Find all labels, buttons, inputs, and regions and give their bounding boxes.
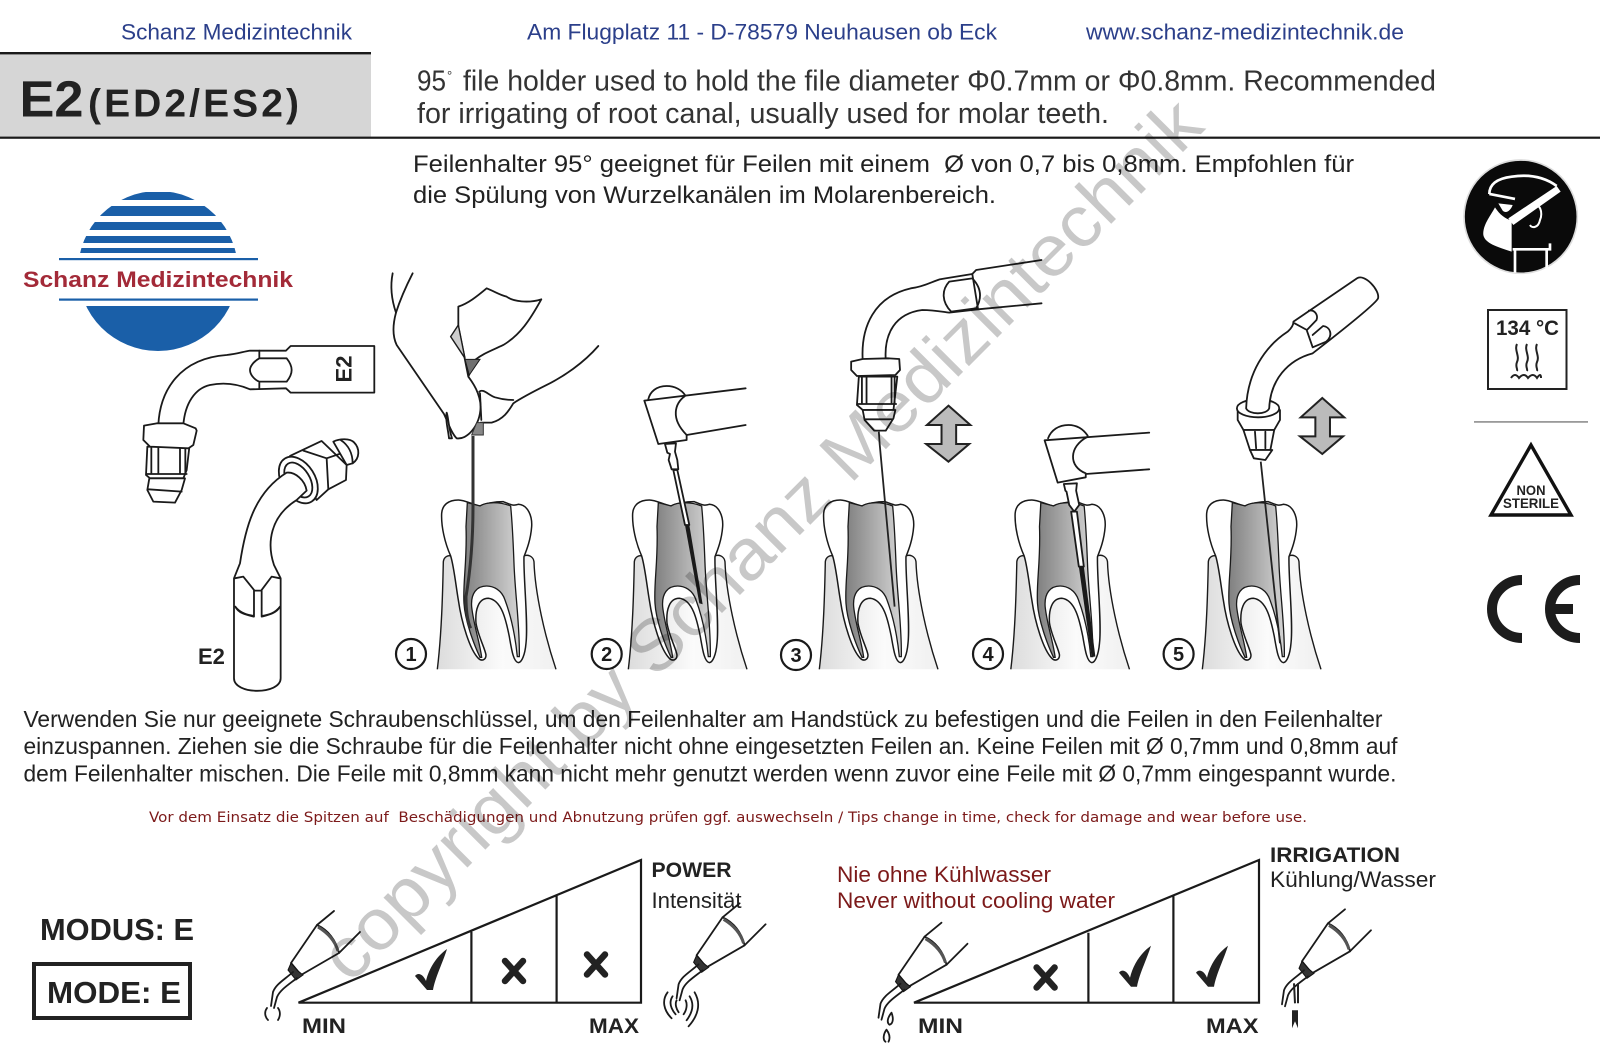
step 3: ultrasonic tip with file <box>819 260 1042 669</box>
English description: file holder used to hold the file diameter Φ0.7mm or Φ0.8mm. Recommended <box>463 66 1436 98</box>
safety icon: wear mask <box>1464 160 1577 273</box>
German description <box>413 151 1354 209</box>
warning line: Vor dem Einsatz die Spitzen auf Beschädigungen und Abnutzung prüfen ggf. auswechseln / Tips change in time, check for damage and wear before use. <box>149 809 1307 826</box>
step numbers: 1 <box>405 644 417 666</box>
English description: ° <box>447 68 452 83</box>
cooling warning text: Nie ohne Kühlwasser <box>837 862 1052 887</box>
non sterile icon: STERILE <box>1503 495 1559 511</box>
instructions paragraph: dem Feilenhalter mischen. Die Feile mit 0,8mm kann nicht mehr genutzt werden wenn zuvor eine Feile mit Ø 0,7mm eingespannt wurde. <box>24 760 1396 786</box>
step 1: hand inserting file <box>391 273 598 669</box>
file holder tip, side view <box>143 346 374 503</box>
German description: die Spülung von Wurzelkanälen im Molarenbereich. <box>413 182 996 209</box>
CE mark <box>1492 580 1580 638</box>
power scale: MIN <box>302 1015 346 1038</box>
sterilization icon: 134 °C <box>1488 310 1566 389</box>
cooling warning text <box>837 862 1116 913</box>
English description <box>417 66 1436 130</box>
English description: for irrigating of root canal, usually used for molar teeth. <box>417 98 1109 130</box>
title panel: (ED2/ES2) <box>88 83 299 126</box>
mode box: MODE: E <box>47 975 181 1010</box>
cooling warning text: Never without cooling water <box>837 888 1116 913</box>
sterilization icon: 134 °C: 134 °C <box>1496 317 1559 340</box>
logo: Schanz Medizintechnik <box>23 267 294 292</box>
mode label: MODUS: E <box>40 912 194 947</box>
step 4: handpiece deep in canal <box>1011 425 1149 669</box>
file holder tip, side view: E2 <box>332 356 356 382</box>
step numbers: 3 <box>790 645 802 667</box>
arrow: up and down motion, step 5 <box>1300 398 1344 454</box>
irrigation scale: Kühlung/Wasser <box>1270 867 1436 892</box>
instructions paragraph: einzuspannen. Ziehen sie die Schraube für die Feilenhalter nicht ohne eingesetzten Feilen an. Keine Feilen mit Ø 0,7mm und 0,8mm auf <box>24 733 1398 759</box>
German description: Feilenhalter 95° geeignet für Feilen mit einem Ø von 0,7 bis 0,8mm. Empfohlen für <box>413 151 1354 178</box>
logo <box>23 192 294 352</box>
irrigation scale: IRRIGATION <box>1270 844 1400 867</box>
header: address: Am Flugplatz 11 - D-78579 Neuhausen ob Eck <box>527 20 998 44</box>
non sterile icon <box>1491 445 1571 515</box>
title panel <box>0 52 1600 139</box>
English description: 95 <box>417 66 446 98</box>
icon: tip with water stream <box>1282 909 1371 1028</box>
file holder tip, top view: E2 <box>198 644 225 669</box>
header: website: www.schanz-medizintechnik.de <box>1085 20 1404 44</box>
step 5: tip at angle with file <box>1202 277 1378 669</box>
step numbers <box>396 639 1194 670</box>
step 2: handpiece in canal <box>628 386 747 669</box>
file holder tip, top view <box>198 439 358 691</box>
arrow: up and down motion, step 3 <box>926 406 970 462</box>
watermark: copyright by Schanz Medizintechnik <box>305 83 1218 996</box>
title panel: E2 <box>20 71 84 128</box>
irrigation scale: MAX <box>1206 1015 1258 1038</box>
step numbers: 5 <box>1173 644 1184 666</box>
non sterile icon: NON <box>1516 482 1546 498</box>
irrigation scale <box>914 844 1436 1038</box>
instructions paragraph: Verwenden Sie nur geeignete Schraubenschlüssel, um den Feilenhalter am Handstück zu befestigen und die Feilen in den Feilenhalter <box>24 706 1383 732</box>
divider <box>1474 421 1588 423</box>
instructions paragraph <box>24 706 1398 786</box>
irrigation scale: MIN <box>918 1015 963 1038</box>
step numbers: 2 <box>601 644 612 666</box>
icon: tip at high power <box>664 903 766 1026</box>
power scale: MAX <box>589 1015 639 1038</box>
power scale: Intensität <box>652 888 742 913</box>
mode box <box>34 964 190 1018</box>
power scale <box>298 859 742 1038</box>
icon: tip with droplets <box>878 923 968 1042</box>
header: company name: Schanz Medizintechnik <box>121 20 353 44</box>
step numbers: 4 <box>982 644 994 666</box>
power scale: POWER <box>652 859 732 882</box>
icon: tip at low power <box>265 911 360 1020</box>
